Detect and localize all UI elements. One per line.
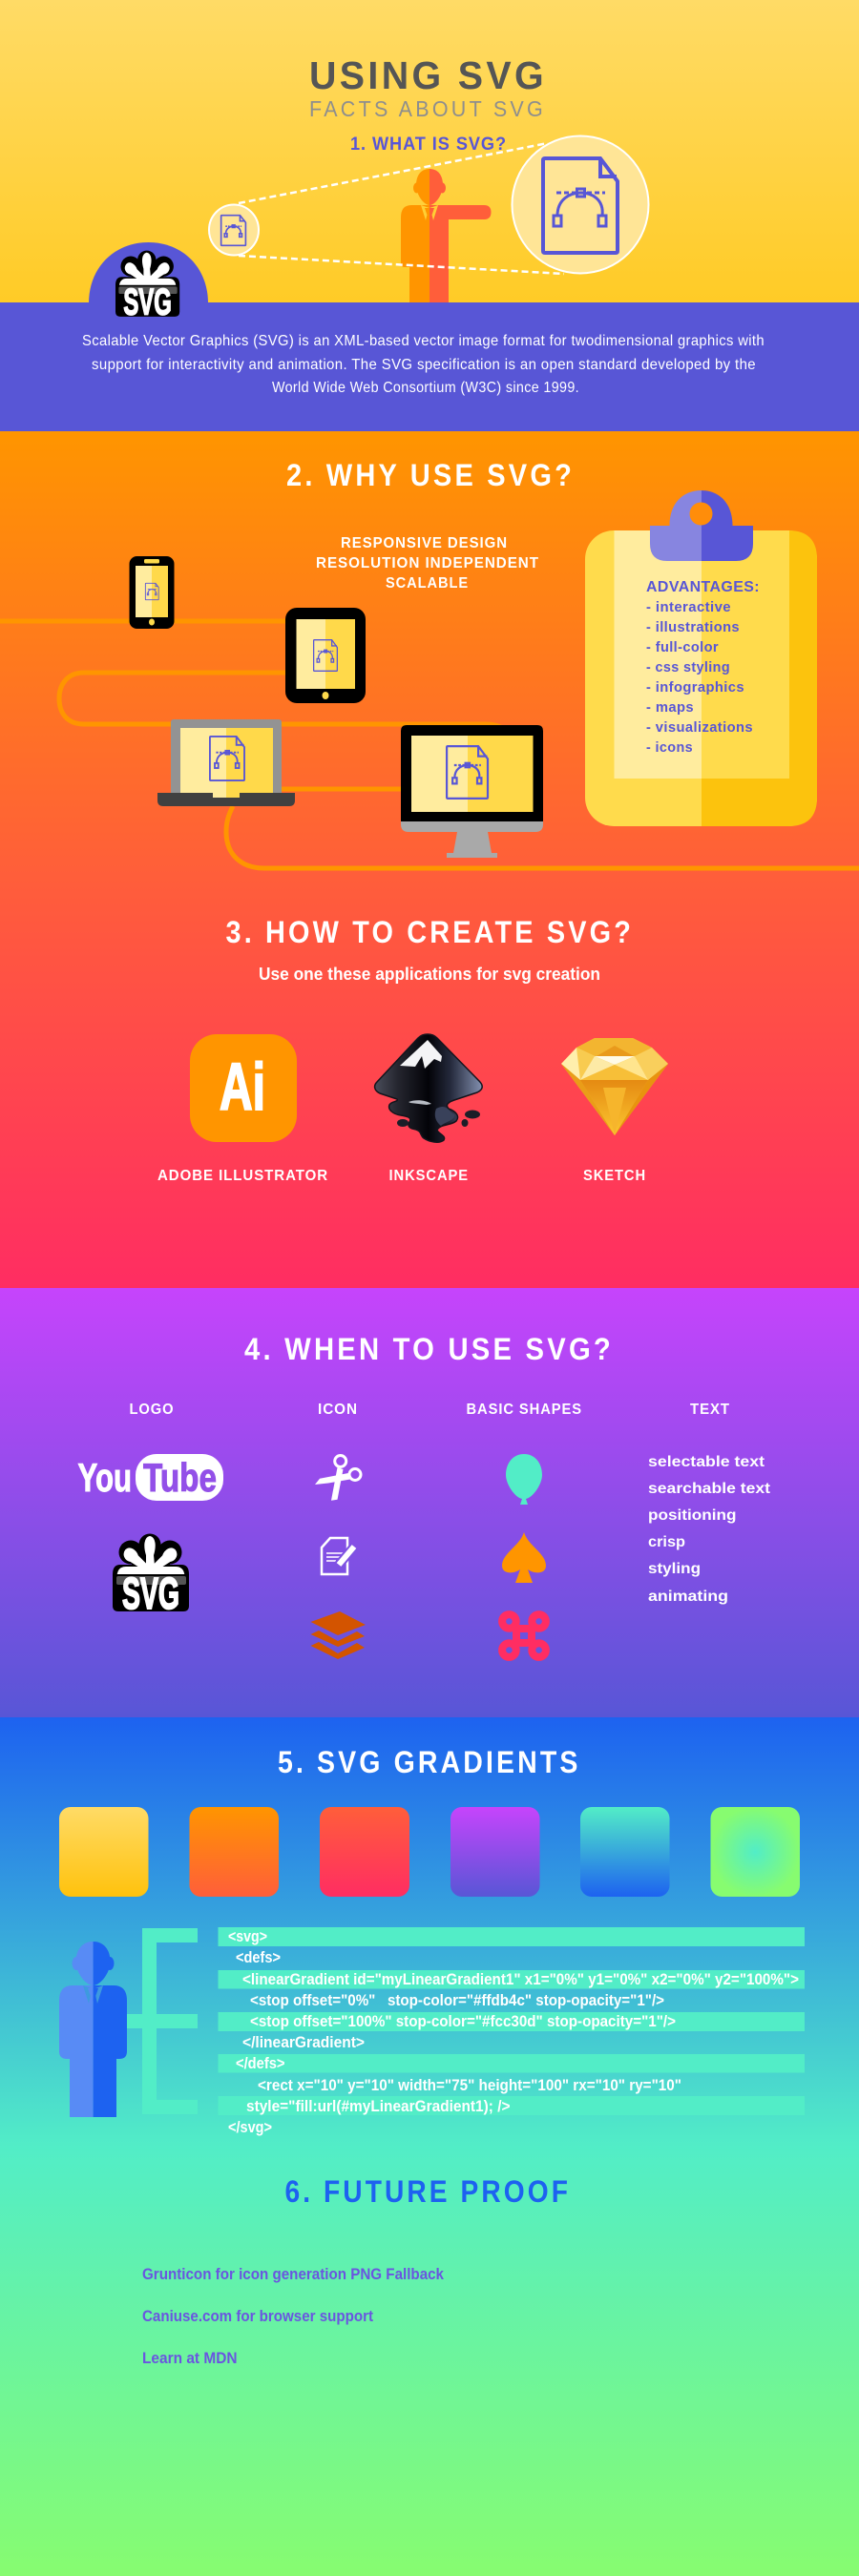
- code block: svg gradient sample: <stop offset="100%" stop-color="#fcc30d" stop-opacity="1"/>: [250, 2012, 676, 2030]
- gradient swatches: [59, 1807, 800, 1897]
- icon: balloon: [506, 1454, 542, 1505]
- panel: section 2 why use svg: [0, 458, 859, 868]
- heading: when to use svg: 4. WHEN TO USE SVG?: [244, 1332, 614, 1366]
- labels: column headings: TEXT: [690, 1402, 730, 1418]
- icon: svg logo: [113, 1534, 189, 1618]
- text block: advantages list: - infographics: [646, 679, 744, 696]
- text block: advantages list: - interactive: [646, 599, 731, 615]
- icon: scissors: [315, 1456, 361, 1501]
- code block: svg gradient sample: <rect x="10" y="10" width="75" height="100" rx="10" ry="10": [258, 2076, 681, 2094]
- labels: column headings: LOGO: [130, 1402, 174, 1418]
- text block: text features: animating: [648, 1589, 728, 1605]
- text block: text features: crisp: [648, 1534, 685, 1550]
- text block: advantages list: [646, 579, 760, 756]
- icon: large magnified document: [512, 135, 649, 273]
- icon: spade: [502, 1532, 546, 1583]
- labels: column headings: [130, 1402, 730, 1418]
- text block: svg definition: [82, 333, 765, 396]
- icon: svg logo: SVG: [123, 281, 172, 322]
- icon: layers: [311, 1611, 366, 1659]
- heading: how to create svg: 3. HOW TO CREATE SVG?: [225, 915, 634, 949]
- icon: phone: [130, 556, 174, 629]
- code block: svg gradient sample: </svg>: [228, 2118, 272, 2136]
- icon: bracket connector: [127, 1928, 198, 2114]
- panel: section 5 svg gradients: [0, 1717, 859, 2147]
- panel: section 3 how to create svg: [157, 915, 668, 1184]
- text block: text features: [648, 1454, 771, 1605]
- text block: resources: Grunticon for icon generation PNG Fallback: [142, 2266, 445, 2283]
- icon: tablet: [285, 608, 366, 703]
- text block: svg benefits: RESPONSIVE DESIGN: [341, 535, 508, 551]
- icon: inkscape: [375, 1034, 482, 1142]
- labels: column headings: ICON: [318, 1402, 358, 1418]
- icon: youtube logo: [78, 1454, 223, 1501]
- icon: adobe illustrator: Ai: [220, 1049, 265, 1124]
- heading: future proof: 6. FUTURE PROOF: [284, 2174, 571, 2209]
- heading: why use svg: 2. WHY USE SVG?: [286, 458, 575, 492]
- icon: svg logo: SVG: [122, 1568, 179, 1618]
- text block: svg definition: Scalable Vector Graphics (SVG) is an XML-based vector image format for twodimensional graphics with: [82, 333, 765, 349]
- icon: small magnified document: [209, 204, 259, 256]
- labels: column headings: BASIC SHAPES: [466, 1402, 582, 1418]
- code block: svg gradient sample: </defs>: [236, 2054, 285, 2072]
- text block: text features: positioning: [648, 1507, 737, 1524]
- icon: blue person: [59, 1942, 127, 2117]
- text block: advantages list: - icons: [646, 739, 693, 756]
- text block: text features: styling: [648, 1561, 701, 1577]
- subtitle: FACTS ABOUT SVG: [309, 96, 546, 121]
- icon: svg logo: [115, 251, 179, 322]
- text block: advantages list: ADVANTAGES:: [646, 579, 760, 595]
- text block: text features: selectable text: [648, 1454, 765, 1470]
- labels: application names: [157, 1168, 646, 1184]
- icon: laptop: [157, 719, 295, 806]
- code block: svg gradient sample: <stop offset="0%" stop-color="#ffdb4c" stop-opacity="1"/>: [250, 1991, 664, 2009]
- icon: youtube logo: Tube: [143, 1455, 217, 1500]
- panel: section 6 future proof: [0, 2147, 859, 2576]
- heading: what is svg: 1. WHAT IS SVG?: [350, 134, 507, 155]
- code block: svg gradient sample: <svg>: [228, 1927, 267, 1945]
- icon: youtube logo: You: [78, 1455, 132, 1500]
- text block: svg benefits: [316, 535, 539, 592]
- text block: advantages list: - visualizations: [646, 719, 753, 736]
- icon: dome behind logo: [89, 242, 208, 303]
- text block: resources: Learn at MDN: [142, 2350, 237, 2367]
- icon: clipboard clip: [650, 490, 753, 561]
- arrow: dashed zoom line bottom: [239, 256, 564, 274]
- code block: svg gradient sample: style="fill:url(#myLinearGradient1); />: [246, 2097, 511, 2115]
- text block: text features: searchable text: [648, 1481, 771, 1497]
- labels: application names: SKETCH: [583, 1168, 646, 1184]
- panel: advantages clipboard: [585, 490, 817, 826]
- text block: advantages list: - maps: [646, 699, 694, 716]
- text block: resources: [142, 2266, 445, 2367]
- icon: person pointing: [401, 169, 491, 302]
- title: USING SVG: [309, 53, 547, 97]
- panel: section 1 what is svg: [0, 0, 859, 302]
- heading: svg gradients: 5. SVG GRADIENTS: [278, 1745, 580, 1779]
- connector line through devices: [0, 621, 859, 868]
- text block: svg benefits: RESOLUTION INDEPENDENT: [316, 555, 539, 571]
- text block: resources: Caniuse.com for browser support: [142, 2308, 373, 2325]
- labels: application names: ADOBE ILLUSTRATOR: [157, 1168, 328, 1184]
- text block: svg definition: World Wide Web Consortium (W3C) since 1999.: [272, 380, 579, 396]
- code block: svg gradient sample: <linearGradient id="myLinearGradient1" x1="0%" y1="0%" x2="0%" y2="100%">: [242, 1970, 799, 1988]
- code block: svg gradient sample: [218, 1927, 805, 2136]
- text block: advantages list: - illustrations: [646, 619, 740, 635]
- icon: sketch diamond: [561, 1038, 668, 1135]
- panel: sections 2 and 3 background: [0, 431, 859, 1288]
- panel: definition band: [0, 242, 859, 431]
- code block: svg gradient sample: </linearGradient>: [242, 2033, 365, 2051]
- panel: section 4 when to use svg: [0, 1288, 859, 1717]
- text block: advantages list: - css styling: [646, 659, 730, 675]
- text: applications intro: Use one these applications for svg creation: [259, 965, 600, 984]
- icon: document with pen: [322, 1538, 354, 1574]
- text block: svg definition: support for interactivity and animation. The SVG specification is an open standard developed by the: [92, 357, 756, 373]
- text block: advantages list: - full-color: [646, 639, 719, 655]
- code block: svg gradient sample: <defs>: [236, 1948, 281, 1966]
- text block: svg benefits: SCALABLE: [386, 575, 469, 592]
- icon: desktop monitor: [401, 725, 543, 858]
- icon: adobe illustrator: [190, 1034, 297, 1142]
- arrow: dashed zoom line top: [239, 143, 548, 203]
- icon: command key: [502, 1614, 546, 1657]
- labels: application names: INKSCAPE: [389, 1168, 469, 1184]
